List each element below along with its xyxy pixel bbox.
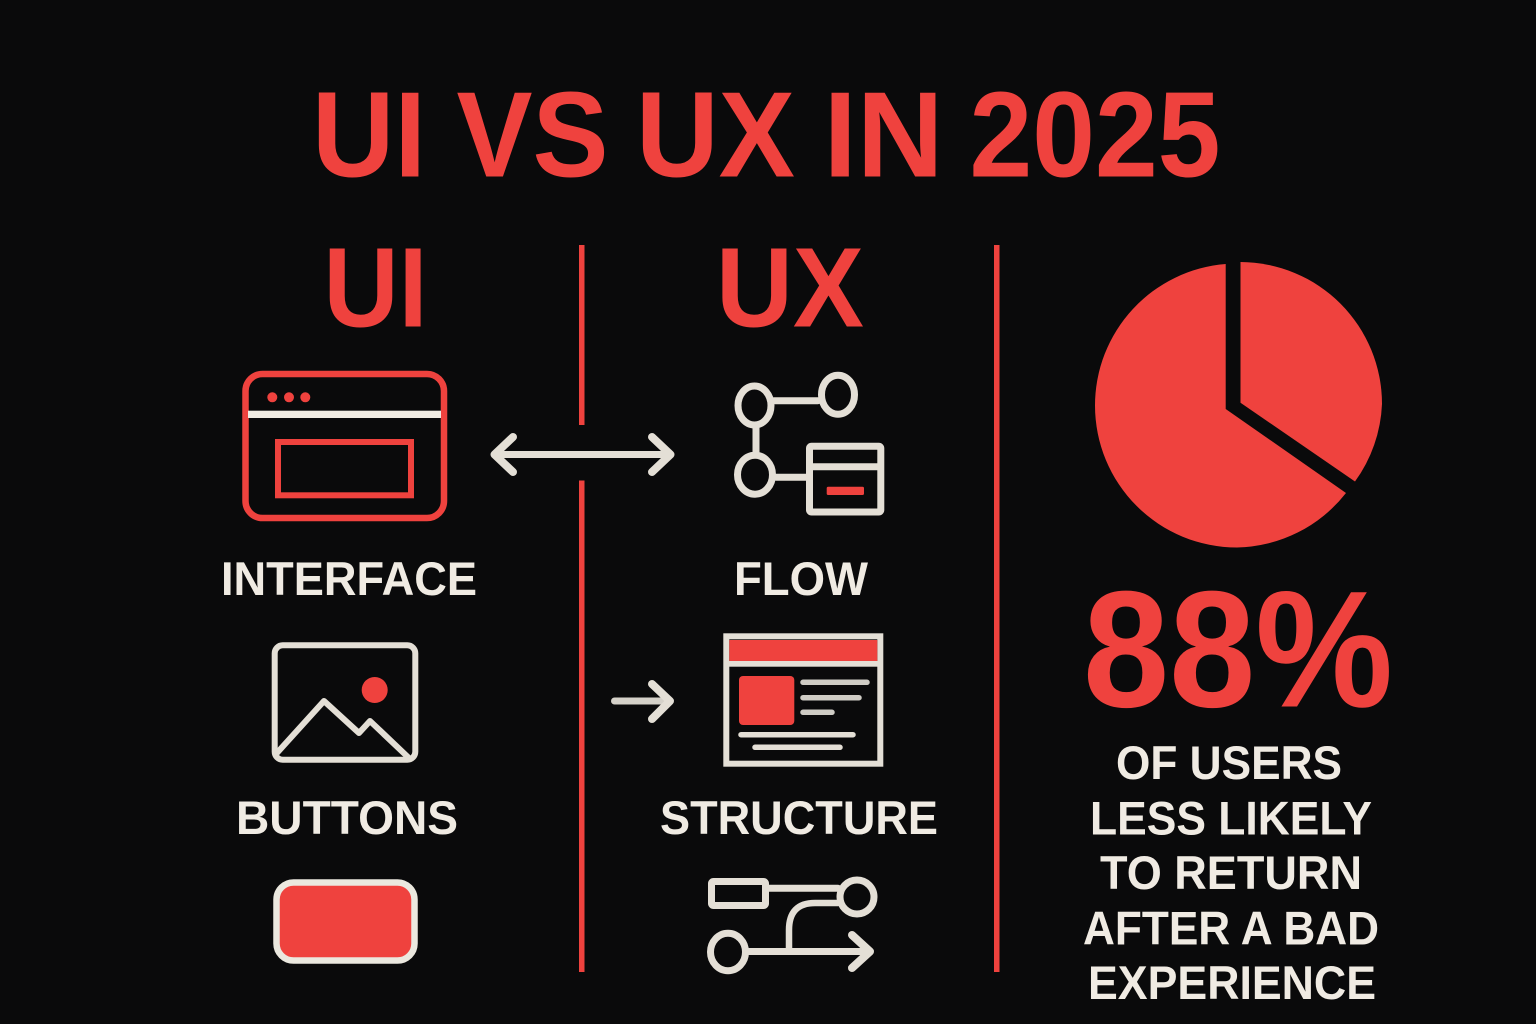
stat description: AFTER A BAD [1083,902,1379,956]
label: structure: STRUCTURE [660,791,938,844]
icon: image placeholder [275,645,415,760]
icon: flow diagram [738,375,881,512]
stat description: TO RETURN [1100,847,1362,900]
title [312,66,1220,202]
stat description: OF USERS [1116,737,1342,790]
stat description [1083,737,1379,1010]
label: flow: FLOW [734,552,869,605]
divider: left upper [579,245,584,425]
pie chart: 88 percent [1095,262,1382,548]
label: buttons: BUTTONS [236,791,458,844]
title: VS [456,66,608,202]
divider: right [994,245,1000,972]
stat description: EXPERIENCE [1088,957,1376,1010]
arrow: double headed [494,437,670,472]
divider: left lower [579,480,584,972]
title: UX [636,66,795,202]
icon: page layout [726,636,880,764]
label: interface: INTERFACE [221,552,477,605]
heading: UX: UX [716,224,864,350]
title: UI [312,66,426,202]
heading: UI: UI [324,224,428,350]
icon: button [276,882,414,960]
icon: browser window [246,374,444,518]
stat: 88%: 88% [1083,558,1393,742]
arrow: right [614,684,670,719]
title: IN [824,66,944,202]
icon: branching path [710,880,874,971]
title: 2025 [970,66,1220,202]
stat description: LESS LIKELY [1090,792,1372,846]
